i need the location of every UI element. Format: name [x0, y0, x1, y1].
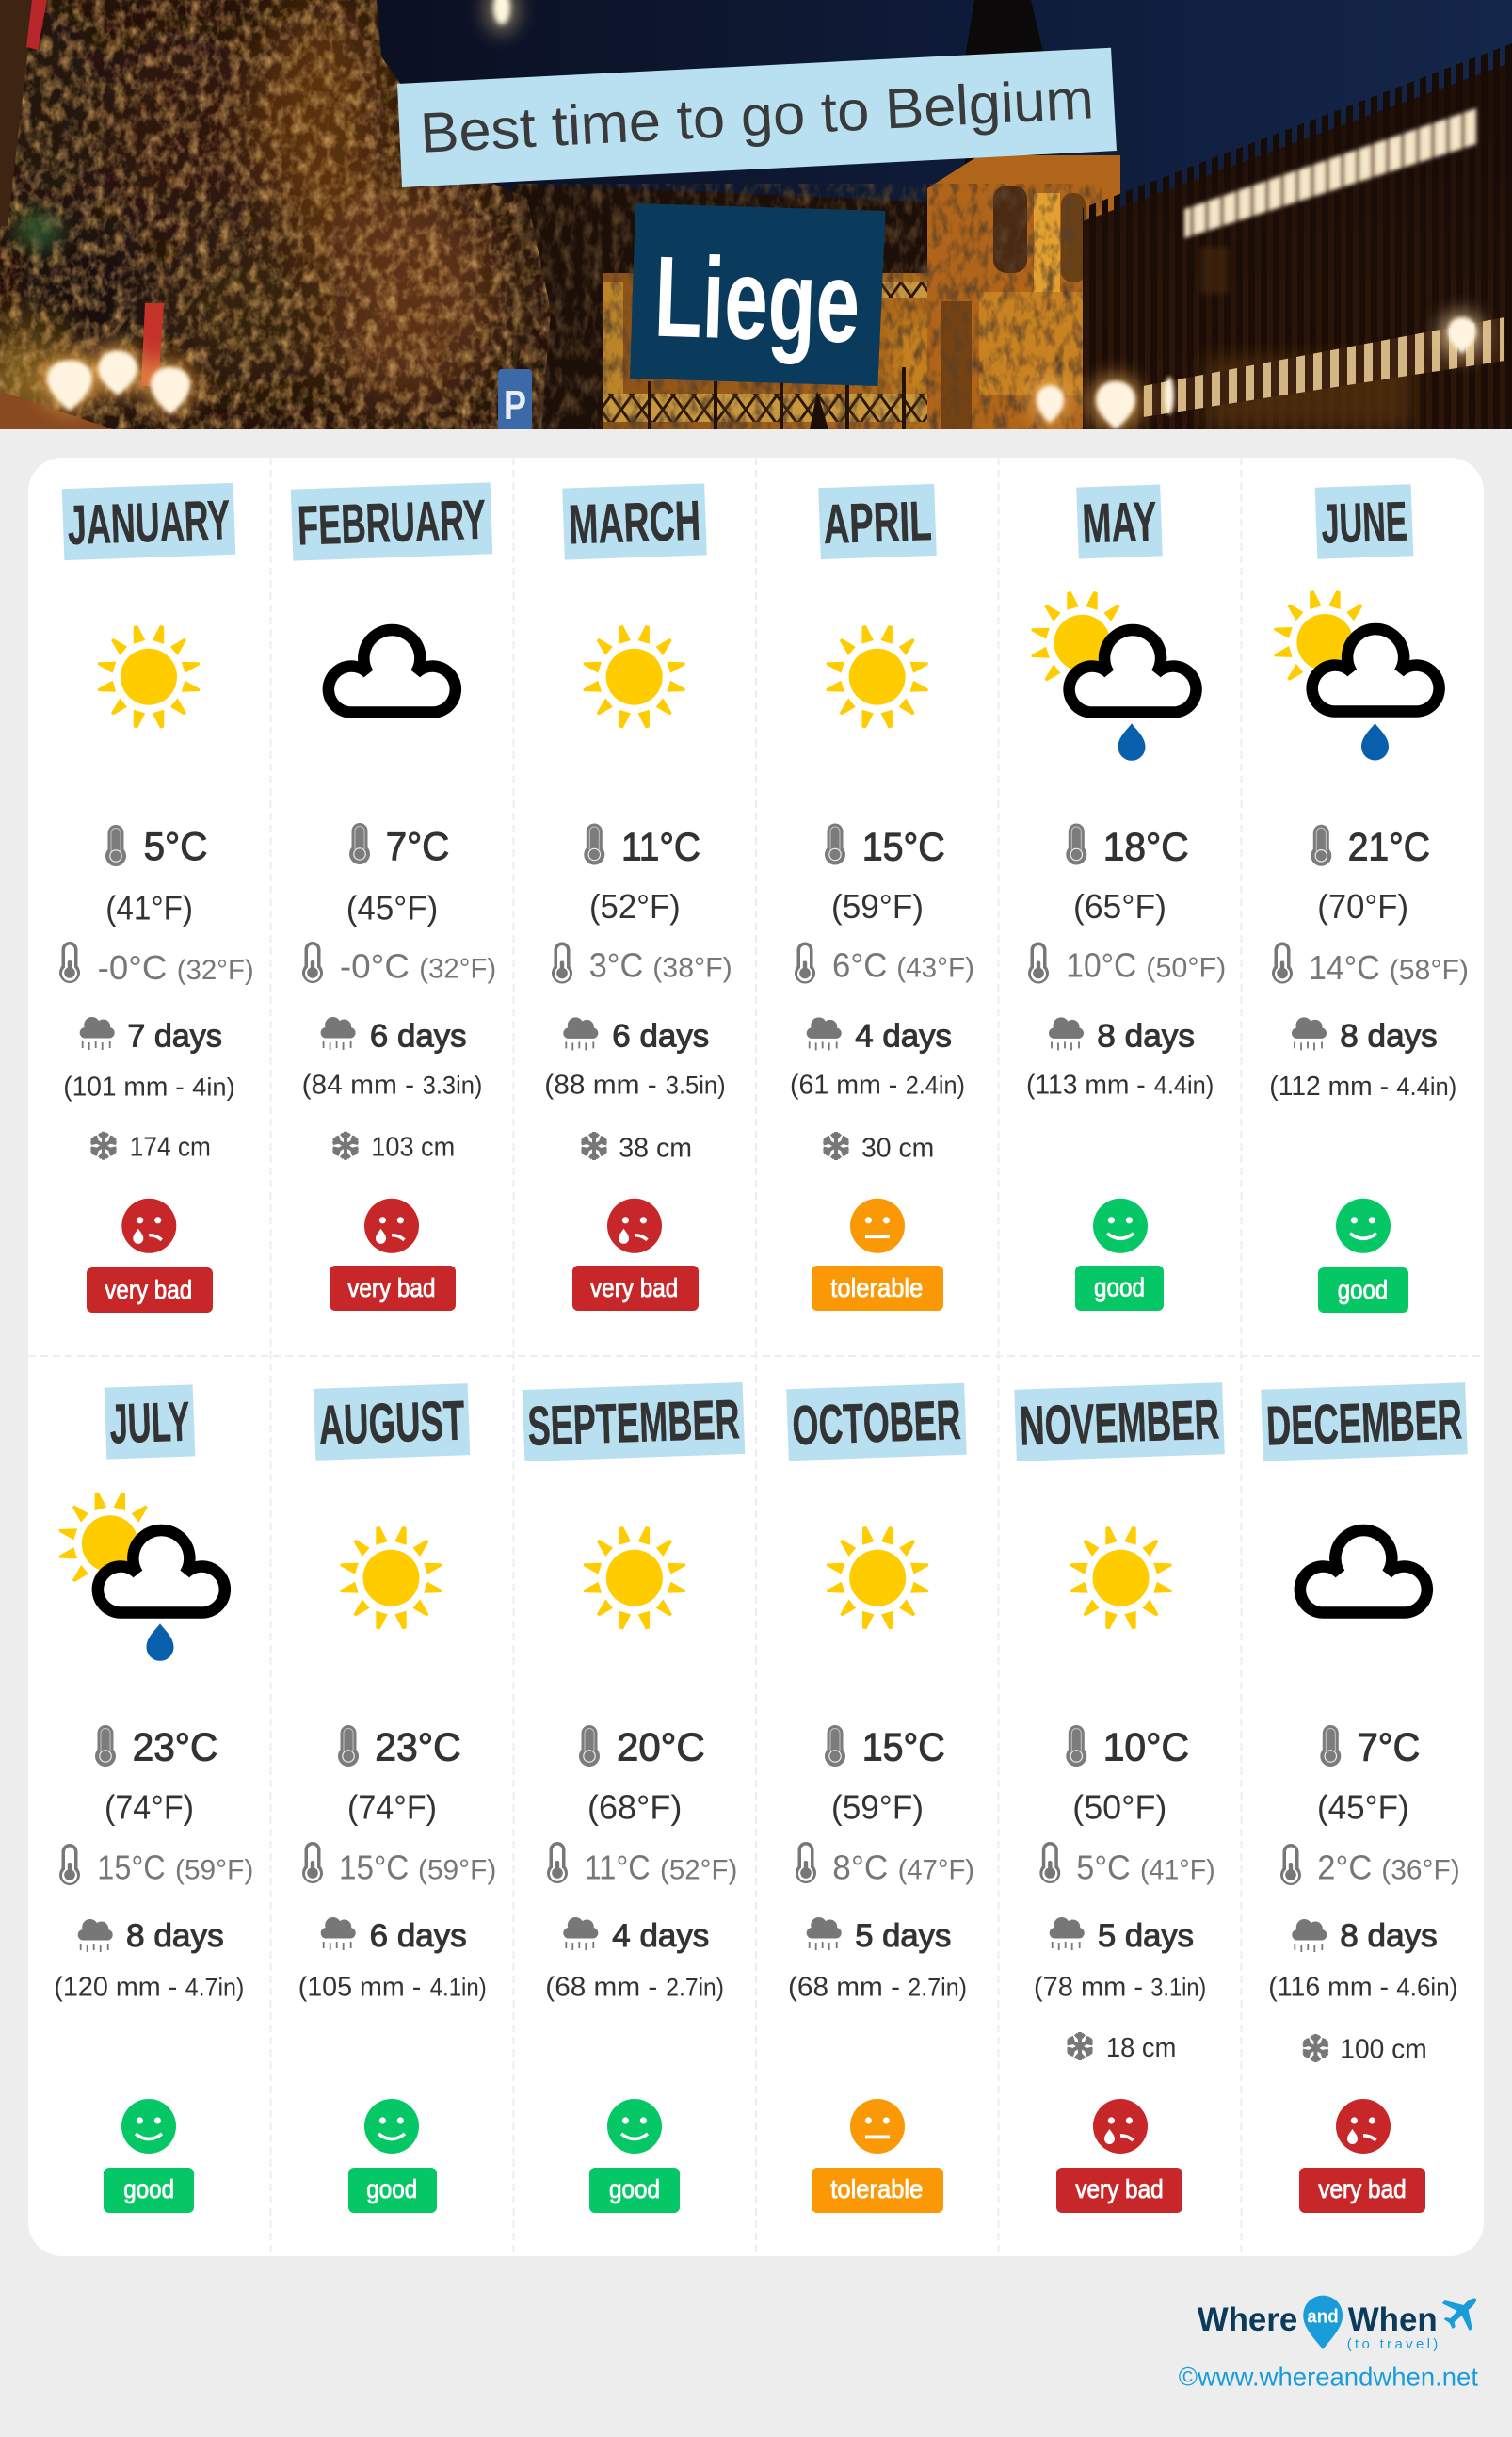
header photo: Liege church at night [0, 0, 1512, 433]
high temperature [825, 1725, 945, 1826]
high temperature: 15°C [862, 1725, 945, 1769]
icon: sun [1070, 1526, 1171, 1629]
rain: (112 mm - [1269, 1072, 1389, 1102]
month heading: OCTOBER [791, 1389, 962, 1457]
photo: parking sign: P [504, 382, 526, 428]
website credit: ©www.whereandwhen.net [1179, 2362, 1478, 2391]
rain: 4.6in) [1396, 1974, 1457, 2002]
rating [87, 1199, 213, 1313]
rain: 8 days [1340, 1918, 1438, 1954]
low temperature [1039, 1842, 1215, 1886]
title banner: Best time to go to Belgium [419, 67, 1095, 165]
low temperature [302, 1842, 496, 1886]
rating: very bad [1318, 2174, 1407, 2203]
month heading [562, 483, 707, 560]
rating [348, 2099, 437, 2213]
month heading [1076, 484, 1163, 559]
high temperature [1066, 1725, 1189, 1826]
rating [572, 1199, 699, 1311]
rain: 7 days [127, 1019, 222, 1055]
high temperature: 11°C [621, 824, 700, 868]
rain: 4.7in) [185, 1974, 244, 2002]
rain [790, 1017, 965, 1100]
month heading: MARCH [568, 490, 701, 556]
rating: good [123, 2174, 174, 2203]
rating: good [366, 2174, 417, 2203]
high temperature: (45°F) [1317, 1787, 1409, 1826]
low temperature [795, 942, 974, 984]
high temperature: 23°C [375, 1725, 461, 1769]
city name box: Liege [652, 233, 861, 366]
rain: (116 mm - [1268, 1973, 1389, 2003]
rain: 4 days [612, 1918, 709, 1954]
rain: (84 mm - [302, 1071, 414, 1101]
panel: May [1026, 484, 1226, 1311]
rating: good [609, 2174, 660, 2203]
month heading: SEPTEMBER [526, 1388, 741, 1458]
high temperature: (59°F) [831, 1787, 924, 1826]
high temperature: 5°C [144, 824, 207, 868]
rain: (68 mm - [788, 1973, 900, 2003]
rating: very bad [347, 1273, 435, 1302]
panel: October [786, 1383, 974, 2213]
month heading [523, 1382, 745, 1461]
logo: Where and When: (to travel) [1347, 2336, 1438, 2352]
rating [1056, 2099, 1182, 2213]
logo: Where and When: When [1348, 2301, 1438, 2338]
high temperature: (65°F) [1073, 887, 1166, 926]
rain: 2.7in) [908, 1974, 967, 2002]
snow: 103 cm [371, 1133, 455, 1163]
panel: June [1269, 484, 1469, 1313]
panel: monthly weather card [28, 458, 1484, 2256]
rating: tolerable [830, 1273, 923, 1302]
high temperature: 20°C [617, 1725, 705, 1769]
rating [589, 2099, 680, 2213]
low temperature: 3°C [589, 945, 643, 984]
icon: sun, cloud and rain drop [1274, 590, 1440, 761]
photo: street lamps [40, 312, 1484, 431]
logo: Where and When [1198, 2296, 1476, 2352]
high temperature [95, 1725, 217, 1826]
panel: September [523, 1382, 745, 2213]
rating: very bad [590, 1273, 678, 1302]
high temperature: 7°C [1358, 1725, 1420, 1769]
high temperature [1066, 823, 1189, 926]
month heading [786, 1383, 967, 1461]
low temperature: (43°F) [896, 952, 974, 983]
rain: 4.4in) [1396, 1073, 1456, 1101]
rain [544, 1017, 726, 1100]
panel: August [298, 1383, 496, 2213]
rain [298, 1917, 487, 2003]
low temperature: (38°F) [652, 952, 732, 983]
low temperature: (36°F) [1381, 1854, 1460, 1885]
icon: cloud [329, 630, 456, 713]
month heading: AUGUST [317, 1389, 466, 1457]
rain [1034, 1917, 1206, 2003]
rain: 5 days [855, 1918, 951, 1954]
month heading: JANUARY [67, 489, 231, 557]
icon: sun [584, 1526, 685, 1629]
rain: 8 days [126, 1918, 224, 1954]
high temperature: 10°C [1103, 1725, 1189, 1769]
high temperature [346, 823, 449, 928]
rain [54, 1918, 244, 2003]
month heading: JUNE [1320, 490, 1408, 556]
rain [63, 1017, 235, 1102]
snow: 30 cm [861, 1134, 934, 1164]
rain: 3.1in) [1150, 1974, 1206, 2002]
rain: 4.1in) [430, 1974, 487, 2002]
rain: 2.7in) [666, 1974, 724, 2002]
snow: 38 cm [619, 1134, 692, 1164]
photo: glowing church wall [513, 155, 1120, 429]
high temperature: (59°F) [831, 887, 924, 926]
high temperature: (70°F) [1317, 887, 1408, 926]
high temperature [825, 823, 945, 926]
rain: 8 days [1340, 1018, 1438, 1054]
low temperature: 15°C [339, 1848, 409, 1886]
rain [302, 1017, 482, 1101]
rain [788, 1917, 967, 2003]
rain: (78 mm - [1034, 1973, 1143, 2003]
high temperature [338, 1725, 461, 1826]
rain: 6 days [370, 1019, 467, 1055]
month heading: JULY [108, 1391, 191, 1455]
low temperature: -0°C [98, 948, 167, 987]
low temperature [302, 942, 496, 985]
month heading [105, 1384, 195, 1460]
low temperature: (58°F) [1390, 955, 1469, 986]
icon: sun, cloud and rain drop [1032, 591, 1197, 761]
low temperature: (41°F) [1140, 1854, 1215, 1885]
photo: moon [485, 0, 519, 34]
snow: 100 cm [1340, 2035, 1427, 2065]
rating [1299, 2099, 1425, 2213]
low temperature [1280, 1844, 1460, 1886]
high temperature: 21°C [1348, 824, 1430, 868]
high temperature [1311, 824, 1430, 926]
panel: February [291, 482, 496, 1311]
high temperature [1317, 1725, 1420, 1826]
icon: airplane [1442, 2298, 1476, 2331]
rating [330, 1199, 456, 1311]
rating: very bad [1075, 2174, 1164, 2203]
snow [580, 1132, 692, 1164]
month heading: FEBRUARY [297, 489, 487, 557]
low temperature: 15°C [97, 1848, 166, 1886]
rain: 6 days [612, 1018, 709, 1054]
snow: 174 cm [130, 1133, 211, 1163]
low temperature: 8°C [832, 1848, 888, 1886]
low temperature [547, 1842, 737, 1886]
low temperature: 10°C [1066, 945, 1136, 984]
rating: very bad [105, 1275, 192, 1304]
month heading: APRIL [822, 490, 933, 556]
icon: sun [341, 1526, 442, 1629]
rain: (101 mm - [63, 1072, 185, 1102]
high temperature: 7°C [386, 824, 449, 868]
logo: Where and When: and [1307, 2307, 1339, 2328]
photo: right building [1083, 43, 1512, 429]
month heading: MAY [1081, 491, 1158, 555]
rating [812, 2099, 943, 2213]
icon: sun, cloud and rain drop [59, 1493, 225, 1661]
icon: cloud [1300, 1530, 1427, 1613]
low temperature [1272, 942, 1469, 987]
rating [812, 1199, 943, 1311]
low temperature: 6°C [832, 945, 887, 984]
rating [104, 2099, 194, 2213]
high temperature: (68°F) [587, 1787, 682, 1826]
snow [331, 1132, 455, 1163]
title banner [397, 48, 1117, 187]
low temperature: (32°F) [177, 955, 254, 986]
panel: March [544, 483, 732, 1311]
rain: 4.4in) [1154, 1071, 1214, 1099]
low temperature: 11°C [585, 1848, 651, 1886]
high temperature: (50°F) [1072, 1787, 1166, 1826]
icon: sun [827, 625, 928, 728]
month heading [314, 1383, 470, 1461]
panel: November [1014, 1382, 1225, 2213]
low temperature: (59°F) [175, 1854, 253, 1885]
low temperature [59, 942, 254, 987]
snow [1066, 2032, 1176, 2063]
high temperature: 23°C [133, 1725, 217, 1769]
rain: (105 mm - [298, 1973, 421, 2003]
rain: (88 mm - [544, 1070, 657, 1100]
low temperature: (32°F) [419, 953, 496, 984]
photo: parking sign [498, 369, 532, 431]
rain: 6 days [370, 1918, 467, 1954]
city name box [630, 203, 886, 386]
high temperature [579, 1725, 705, 1826]
rain: 2.4in) [906, 1071, 965, 1099]
low temperature [1028, 942, 1226, 984]
rain [1269, 1017, 1456, 1102]
rain: (113 mm - [1026, 1070, 1146, 1100]
icon: sun [827, 1526, 928, 1629]
snow: 18 cm [1106, 2033, 1176, 2063]
rain: (120 mm - [54, 1973, 177, 2003]
rain: 4 days [855, 1018, 952, 1054]
rating: tolerable [830, 2174, 923, 2203]
low temperature: 14°C [1309, 948, 1380, 987]
low temperature: 5°C [1076, 1848, 1131, 1886]
panel: July [54, 1384, 253, 2213]
low temperature [552, 942, 732, 984]
rain: (61 mm - [790, 1070, 897, 1100]
low temperature: (47°F) [898, 1854, 974, 1885]
month heading [1014, 1382, 1225, 1461]
logo: Where and When: Where [1198, 2301, 1297, 2338]
high temperature: 15°C [862, 824, 945, 868]
high temperature: (74°F) [347, 1787, 437, 1826]
high temperature [584, 823, 700, 926]
snow [89, 1132, 211, 1163]
rain: (68 mm - [545, 1973, 657, 2003]
panel: January [59, 483, 254, 1313]
panel: April [790, 484, 974, 1311]
month heading: NOVEMBER [1019, 1388, 1220, 1458]
rain: 3.5in) [666, 1071, 726, 1099]
low temperature: -0°C [340, 946, 410, 985]
rating: good [1338, 1275, 1388, 1304]
low temperature: 2°C [1317, 1848, 1372, 1886]
icon: sun [584, 625, 685, 728]
rain: 8 days [1097, 1018, 1195, 1054]
high temperature: (45°F) [346, 889, 438, 928]
rating [1318, 1199, 1408, 1313]
high temperature: 18°C [1103, 824, 1189, 868]
icon: sun [98, 625, 200, 728]
low temperature [59, 1844, 253, 1886]
rating [1075, 1199, 1164, 1311]
rain: 3.3in) [423, 1072, 482, 1100]
month heading [291, 482, 492, 561]
high temperature: (52°F) [589, 887, 681, 926]
rain [1268, 1918, 1457, 2003]
low temperature: (59°F) [418, 1854, 496, 1885]
high temperature [105, 824, 207, 928]
month heading [1315, 484, 1413, 559]
month heading [62, 483, 235, 560]
rain: 4in) [192, 1073, 235, 1101]
rain [1026, 1017, 1214, 1100]
low temperature: (52°F) [660, 1854, 737, 1885]
panel: December [1261, 1382, 1468, 2213]
rain [545, 1917, 724, 2003]
rating: good [1094, 1273, 1145, 1301]
snow [1301, 2034, 1427, 2065]
low temperature [796, 1842, 974, 1886]
snow [822, 1132, 934, 1164]
high temperature: (74°F) [105, 1787, 194, 1826]
rain: 5 days [1098, 1918, 1194, 1954]
month heading [818, 484, 937, 559]
high temperature: (41°F) [105, 889, 193, 928]
low temperature: (50°F) [1146, 952, 1226, 983]
